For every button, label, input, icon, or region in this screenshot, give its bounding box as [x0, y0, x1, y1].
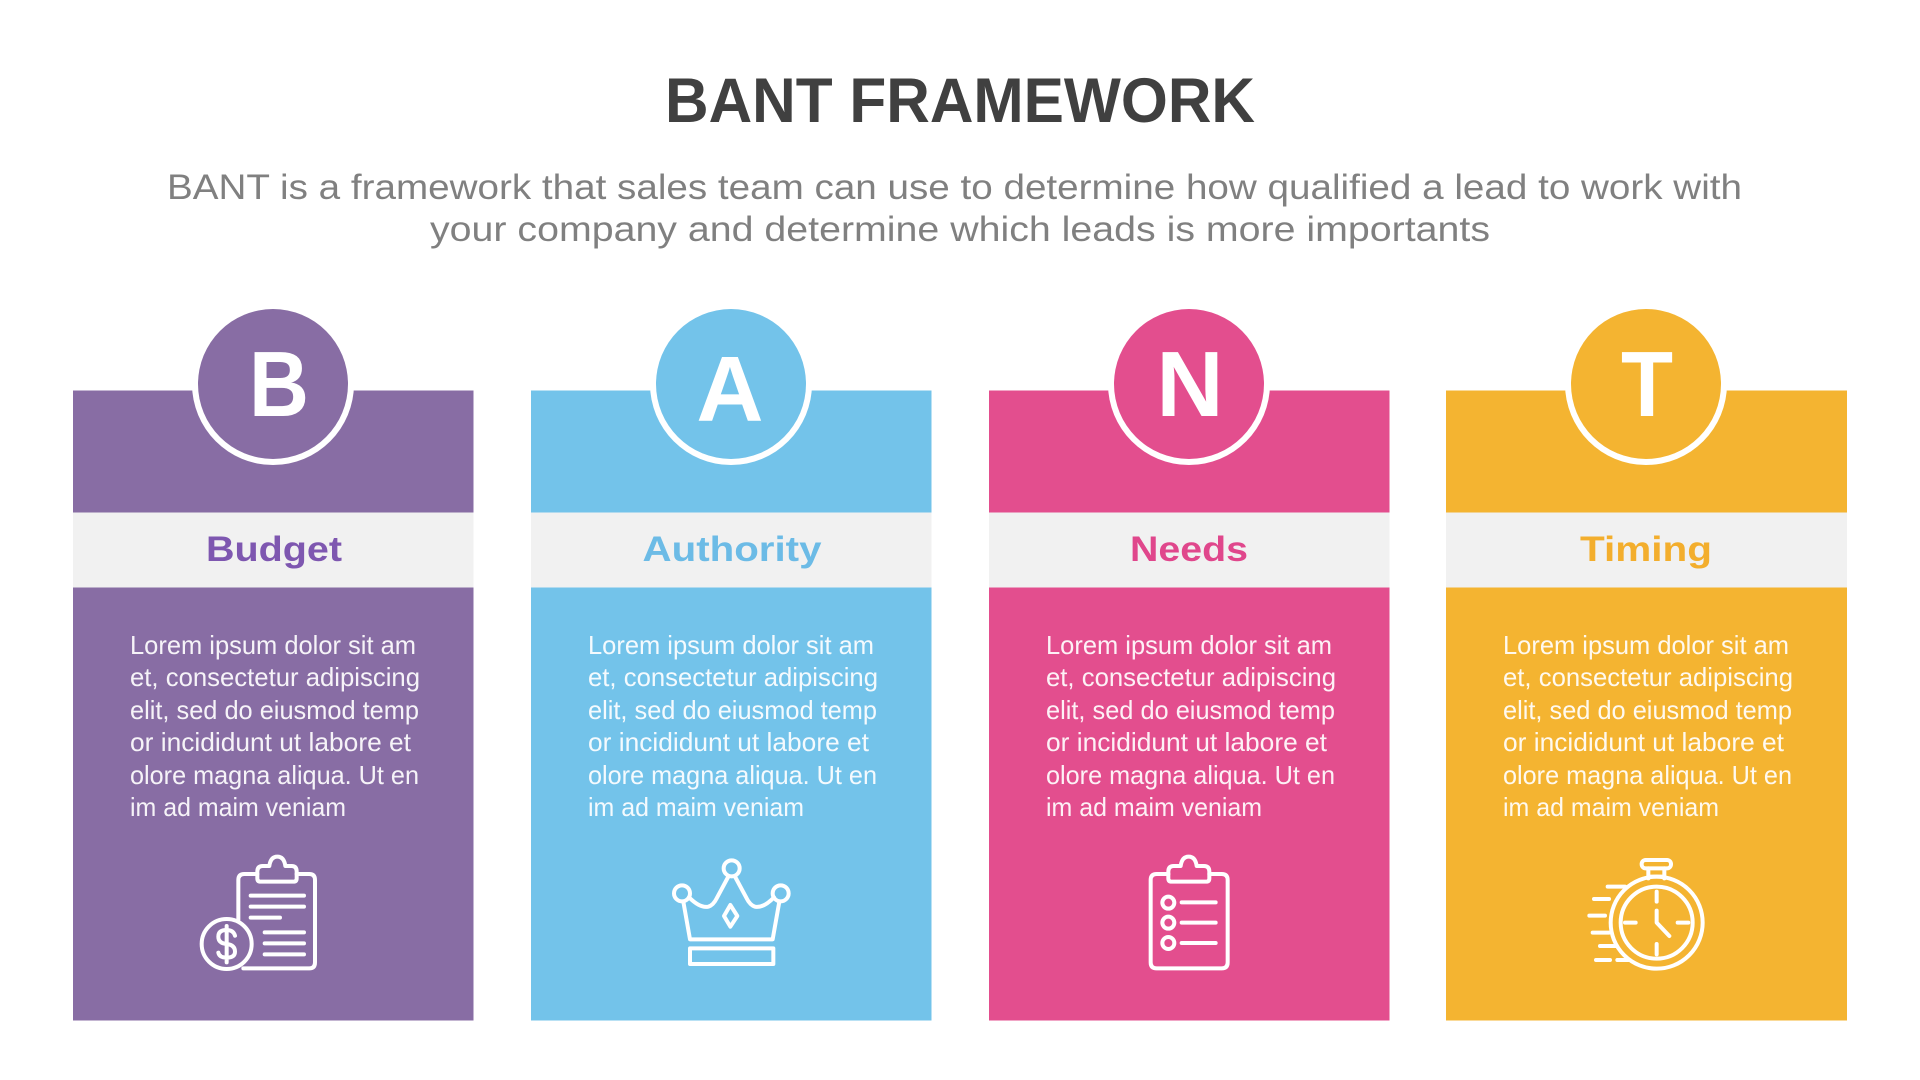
body text: im ad maim veniam [588, 792, 804, 822]
body text: olore magna aliqua. Ut en [130, 760, 419, 790]
body text: im ad maim veniam [1503, 792, 1719, 822]
body text: or incididunt ut labore et [1046, 727, 1328, 757]
body text: olore magna aliqua. Ut en [1046, 760, 1335, 790]
title: BANT FRAMEWORK [665, 66, 1255, 136]
body text: Lorem ipsum dolor sit am [130, 630, 416, 660]
subtitle: BANT is a framework that sales team can use to determine how qualified a lead to work with [167, 168, 1742, 207]
body text [588, 630, 878, 822]
body text: im ad maim veniam [1046, 792, 1262, 822]
heading: Authority: Authority [642, 530, 822, 569]
body text: olore magna aliqua. Ut en [1503, 760, 1792, 790]
body text: Lorem ipsum dolor sit am [588, 630, 874, 660]
body text: im ad maim veniam [130, 792, 346, 822]
letter T: T [1621, 332, 1673, 436]
body text [1046, 630, 1336, 822]
body text: or incididunt ut labore et [1503, 727, 1785, 757]
body text: elit, sed do eiusmod temp [1503, 695, 1792, 725]
letter A: A [696, 337, 764, 441]
body text: et, consectetur adipiscing [130, 662, 420, 692]
body text: olore magna aliqua. Ut en [588, 760, 877, 790]
body text: or incididunt ut labore et [130, 727, 412, 757]
body text [1503, 630, 1793, 822]
subtitle [167, 168, 1742, 249]
heading: Budget: Budget [206, 530, 342, 569]
icon: stopwatch [1589, 860, 1703, 969]
body text: elit, sed do eiusmod temp [130, 695, 419, 725]
body text: Lorem ipsum dolor sit am [1503, 630, 1789, 660]
body text: elit, sed do eiusmod temp [1046, 695, 1335, 725]
body text [130, 630, 420, 822]
body text: et, consectetur adipiscing [1503, 662, 1793, 692]
icon: clipboard with dollar coin [202, 857, 315, 969]
panel: needs [989, 303, 1390, 1020]
icon: crown [674, 860, 789, 964]
panel: authority [531, 303, 932, 1020]
icon: checklist clipboard [1151, 857, 1228, 968]
body text: or incididunt ut labore et [588, 727, 870, 757]
body text: et, consectetur adipiscing [1046, 662, 1336, 692]
body text: et, consectetur adipiscing [588, 662, 878, 692]
body text: Lorem ipsum dolor sit am [1046, 630, 1332, 660]
panel: timing [1446, 303, 1847, 1020]
panel: budget [73, 303, 474, 1020]
heading: Timing: Timing [1580, 530, 1712, 569]
body text: elit, sed do eiusmod temp [588, 695, 877, 725]
subtitle: your company and determine which leads is more importants [430, 210, 1490, 249]
letter N: N [1156, 332, 1224, 436]
heading: Needs: Needs [1130, 530, 1248, 569]
letter B: B [249, 332, 309, 436]
